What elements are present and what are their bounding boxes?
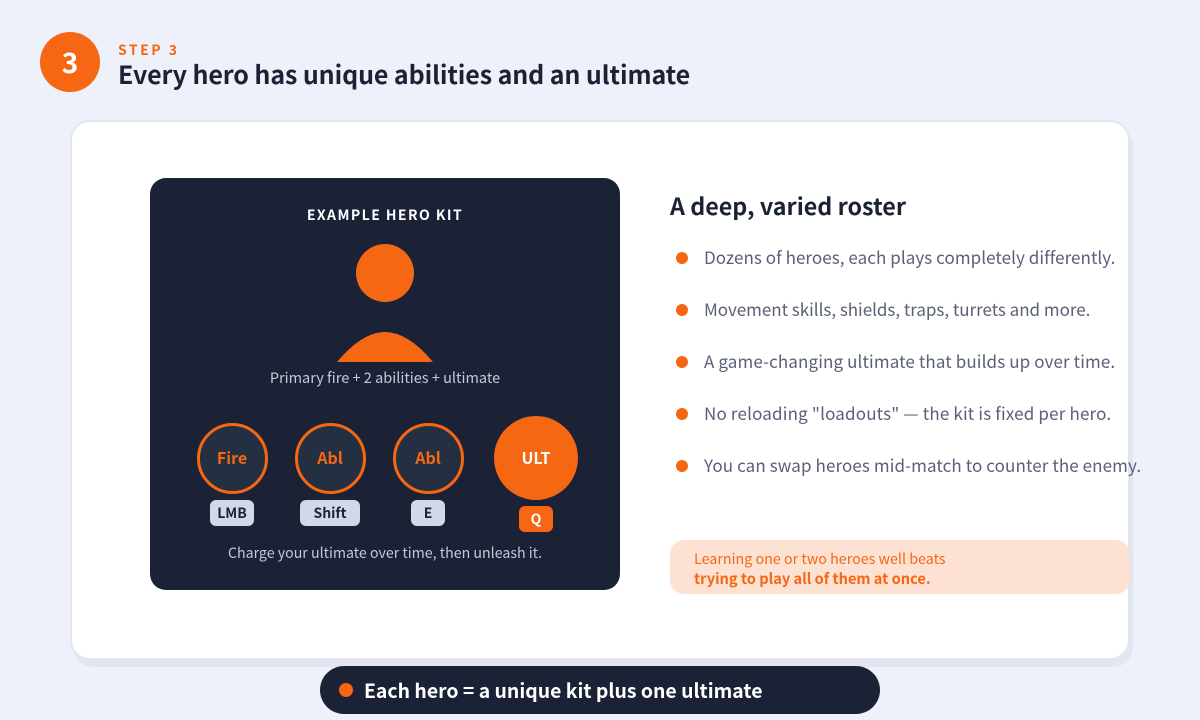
ability: fire: Fire <box>217 445 247 469</box>
kit footnote: Charge your ultimate over time, then unleash it. <box>228 543 542 563</box>
bullet 4: No reloading "loadouts" — the kit is fixed per hero. <box>704 400 1111 425</box>
kit heading: EXAMPLE HERO KIT <box>307 205 463 225</box>
bullet 2 dot <box>676 304 688 316</box>
key: LMB: LMB <box>217 503 247 523</box>
kit caption: Primary fire + 2 abilities + ultimate <box>270 367 500 388</box>
callout: Learning one or two heroes well beats <box>694 548 946 569</box>
roster heading: A deep, varied roster <box>670 188 906 222</box>
takeaway bar <box>320 666 880 714</box>
bullet 1: Dozens of heroes, each plays completely differently. <box>704 244 1115 269</box>
ability: E: Abl <box>415 445 441 469</box>
callout <box>670 540 1130 594</box>
key: E: E <box>424 503 432 523</box>
title: Every hero has unique abilities and an ultimate <box>118 56 690 92</box>
key: Shift <box>300 500 360 526</box>
key: Q: Q <box>531 509 541 529</box>
bullet 5: You can swap heroes mid-match to counter the enemy. <box>704 452 1141 477</box>
bullet 3 dot <box>676 356 688 368</box>
bullet 4 dot <box>676 408 688 420</box>
ability: ultimate <box>494 416 578 500</box>
step label: STEP 3 <box>118 40 180 60</box>
callout: trying to play all of them at once. <box>694 568 931 589</box>
bullet 3: A game-changing ultimate that builds up over time. <box>704 348 1115 373</box>
ability: shift: Abl <box>317 445 343 469</box>
ability: E <box>392 422 464 494</box>
step badge: 3 <box>62 42 78 82</box>
bullet 2: Movement skills, shields, traps, turrets and more. <box>704 296 1090 321</box>
key: Shift: Shift <box>313 503 347 523</box>
takeaway dot <box>339 683 353 697</box>
bullet 1 dot <box>676 252 688 264</box>
icon: hero silhouette <box>337 244 433 362</box>
panel: main card <box>70 120 1130 660</box>
takeaway text: Each hero = a unique kit plus one ultimate <box>364 675 762 704</box>
ability: shift <box>294 422 366 494</box>
key: Q <box>519 506 553 532</box>
key: E <box>411 500 445 526</box>
panel: example hero kit <box>150 178 620 590</box>
bullet 5 dot <box>676 460 688 472</box>
ability: fire <box>196 422 268 494</box>
ability: ultimate: ULT <box>521 445 551 469</box>
key: LMB <box>210 500 254 526</box>
step badge <box>40 32 100 92</box>
